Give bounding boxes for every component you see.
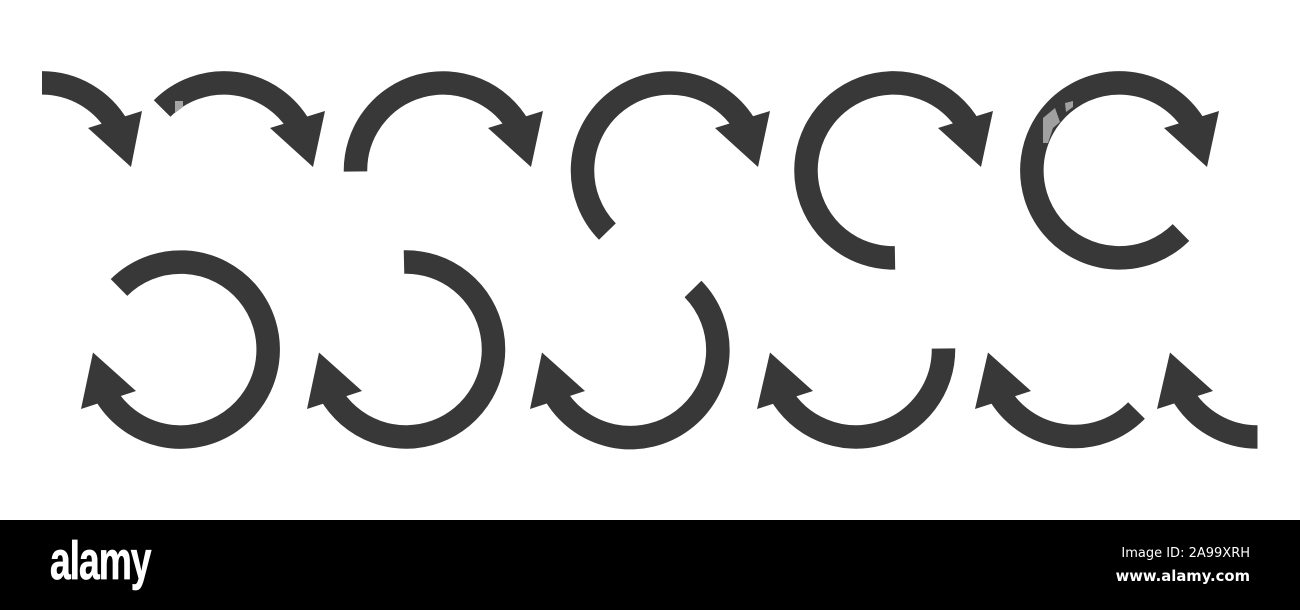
arrow: bottom row 2 bbox=[307, 262, 494, 437]
arrow: top row 5 bbox=[806, 83, 993, 258]
arrow: bottom row 4 bbox=[757, 348, 944, 437]
arrow: bottom row 5 bbox=[975, 352, 1136, 437]
arrow: bottom row 3 bbox=[530, 289, 718, 438]
arrow: top row 3 bbox=[355, 83, 543, 172]
arrow: top row 2 bbox=[162, 83, 325, 167]
arrow: bottom row 1 bbox=[81, 262, 268, 437]
website: www.alamy.com bbox=[1116, 568, 1250, 584]
image id: Image ID: 2A99XRH bbox=[1121, 546, 1250, 560]
arrow: top row 6 bbox=[1032, 83, 1219, 258]
arrow: bottom row 6 bbox=[1157, 352, 1258, 437]
logo: alamy bbox=[50, 531, 150, 591]
arrow: top row 4 bbox=[583, 83, 770, 232]
arrow: short quarter arc top row bbox=[42, 83, 142, 167]
footer bar bbox=[0, 520, 1300, 610]
